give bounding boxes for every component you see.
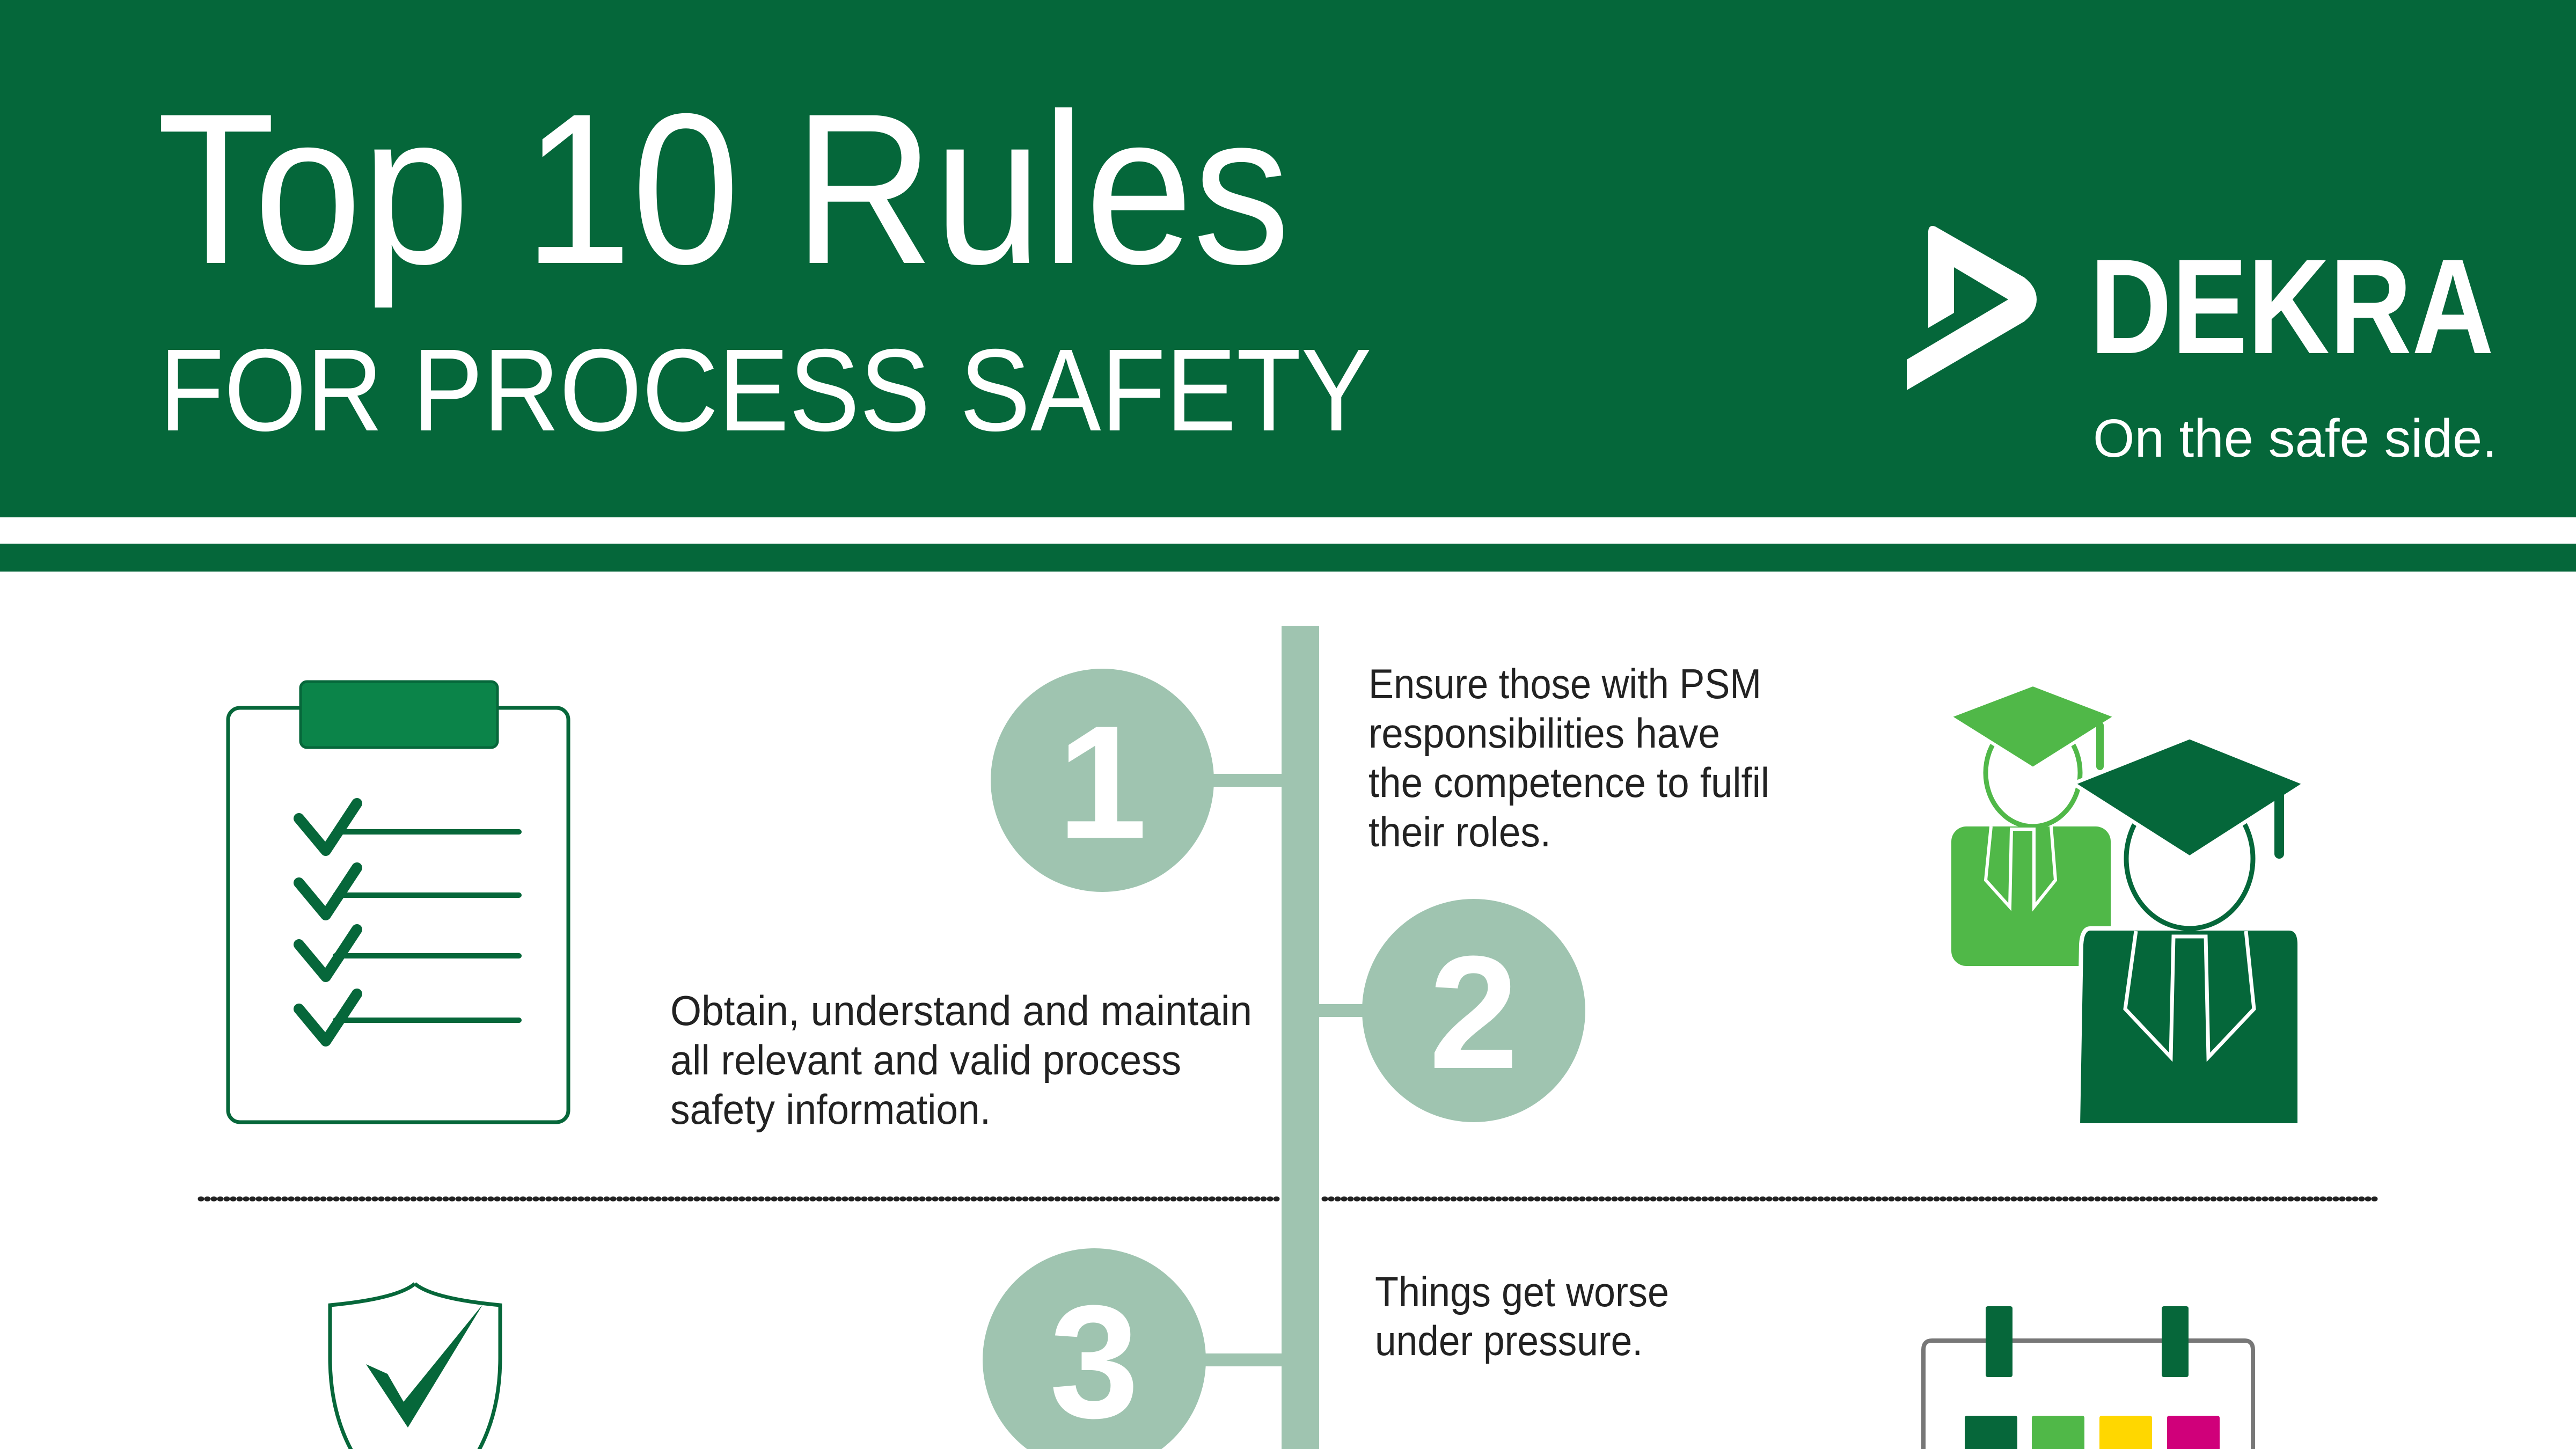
rule 2 marker <box>1318 899 1585 1122</box>
rule 1 text: responsibilities have <box>1368 709 1720 757</box>
logo: DEKRA: DEKRA <box>2090 231 2494 382</box>
title: Top 10 Rules <box>157 69 1290 310</box>
rule 2 text <box>670 987 1252 1133</box>
rule 3 text: Things get worse <box>1375 1268 1669 1315</box>
icon: clipboard checklist <box>228 682 568 1122</box>
title <box>157 69 1372 456</box>
rule 2 text: all relevant and valid process <box>670 1036 1181 1084</box>
logo: DEKRA <box>1907 226 2497 469</box>
dotted divider <box>200 1197 2375 1201</box>
rule 3 text <box>1375 1268 1669 1364</box>
icon: graduates <box>1950 685 2305 1125</box>
title: FOR PROCESS SAFETY <box>159 325 1372 456</box>
rule 3 marker <box>983 1248 1283 1449</box>
rule 3 text: under pressure. <box>1375 1317 1643 1364</box>
icon: calendar <box>1923 1306 2253 1449</box>
rule 1 marker <box>991 669 1283 892</box>
rule 2 marker: 2 <box>1429 922 1518 1102</box>
timeline vertical bar <box>1282 626 1319 1449</box>
rule 2 text: safety information. <box>670 1086 991 1133</box>
rule 1 text <box>1368 660 1769 855</box>
logo: DEKRA: On the safe side. <box>2093 408 2497 469</box>
rule 1 text: Ensure those with PSM <box>1368 660 1761 707</box>
icon: DEKRA arrow mark <box>1907 226 2037 390</box>
rule 3 marker: 3 <box>1050 1271 1139 1449</box>
rule 1 text: their roles. <box>1368 808 1551 855</box>
icon: shield with check <box>330 1284 500 1449</box>
rule 1 text: the competence to fulfil <box>1368 759 1769 806</box>
dark green graduate <box>2073 737 2305 1125</box>
header band <box>0 0 2576 572</box>
light green graduate <box>1950 685 2116 966</box>
rule 1 marker: 1 <box>1058 692 1147 872</box>
rule 2 text: Obtain, understand and maintain <box>670 987 1252 1034</box>
